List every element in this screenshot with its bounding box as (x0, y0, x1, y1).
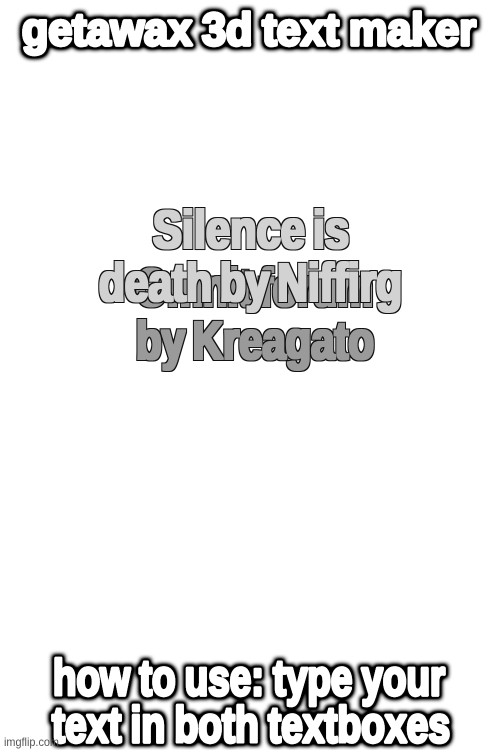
back text line: by Kreagato: by Kreagato (136, 311, 374, 371)
instructions caption: how to use (52, 650, 450, 750)
front text line: death by Niffirg: death by Niffirg (99, 253, 402, 313)
back text layer: hidden forum title by Kreagato (136, 258, 374, 371)
back text line: forum title: Omnit forum (136, 258, 373, 318)
watermark: imgflip.com: imgflip.com (4, 735, 59, 749)
front text layer: Silence is death by Niffirg (99, 200, 402, 313)
title: getawax 3d text maker: getawax 3d text maker (22, 4, 476, 55)
front text line: Silence is: Silence is (153, 200, 349, 260)
